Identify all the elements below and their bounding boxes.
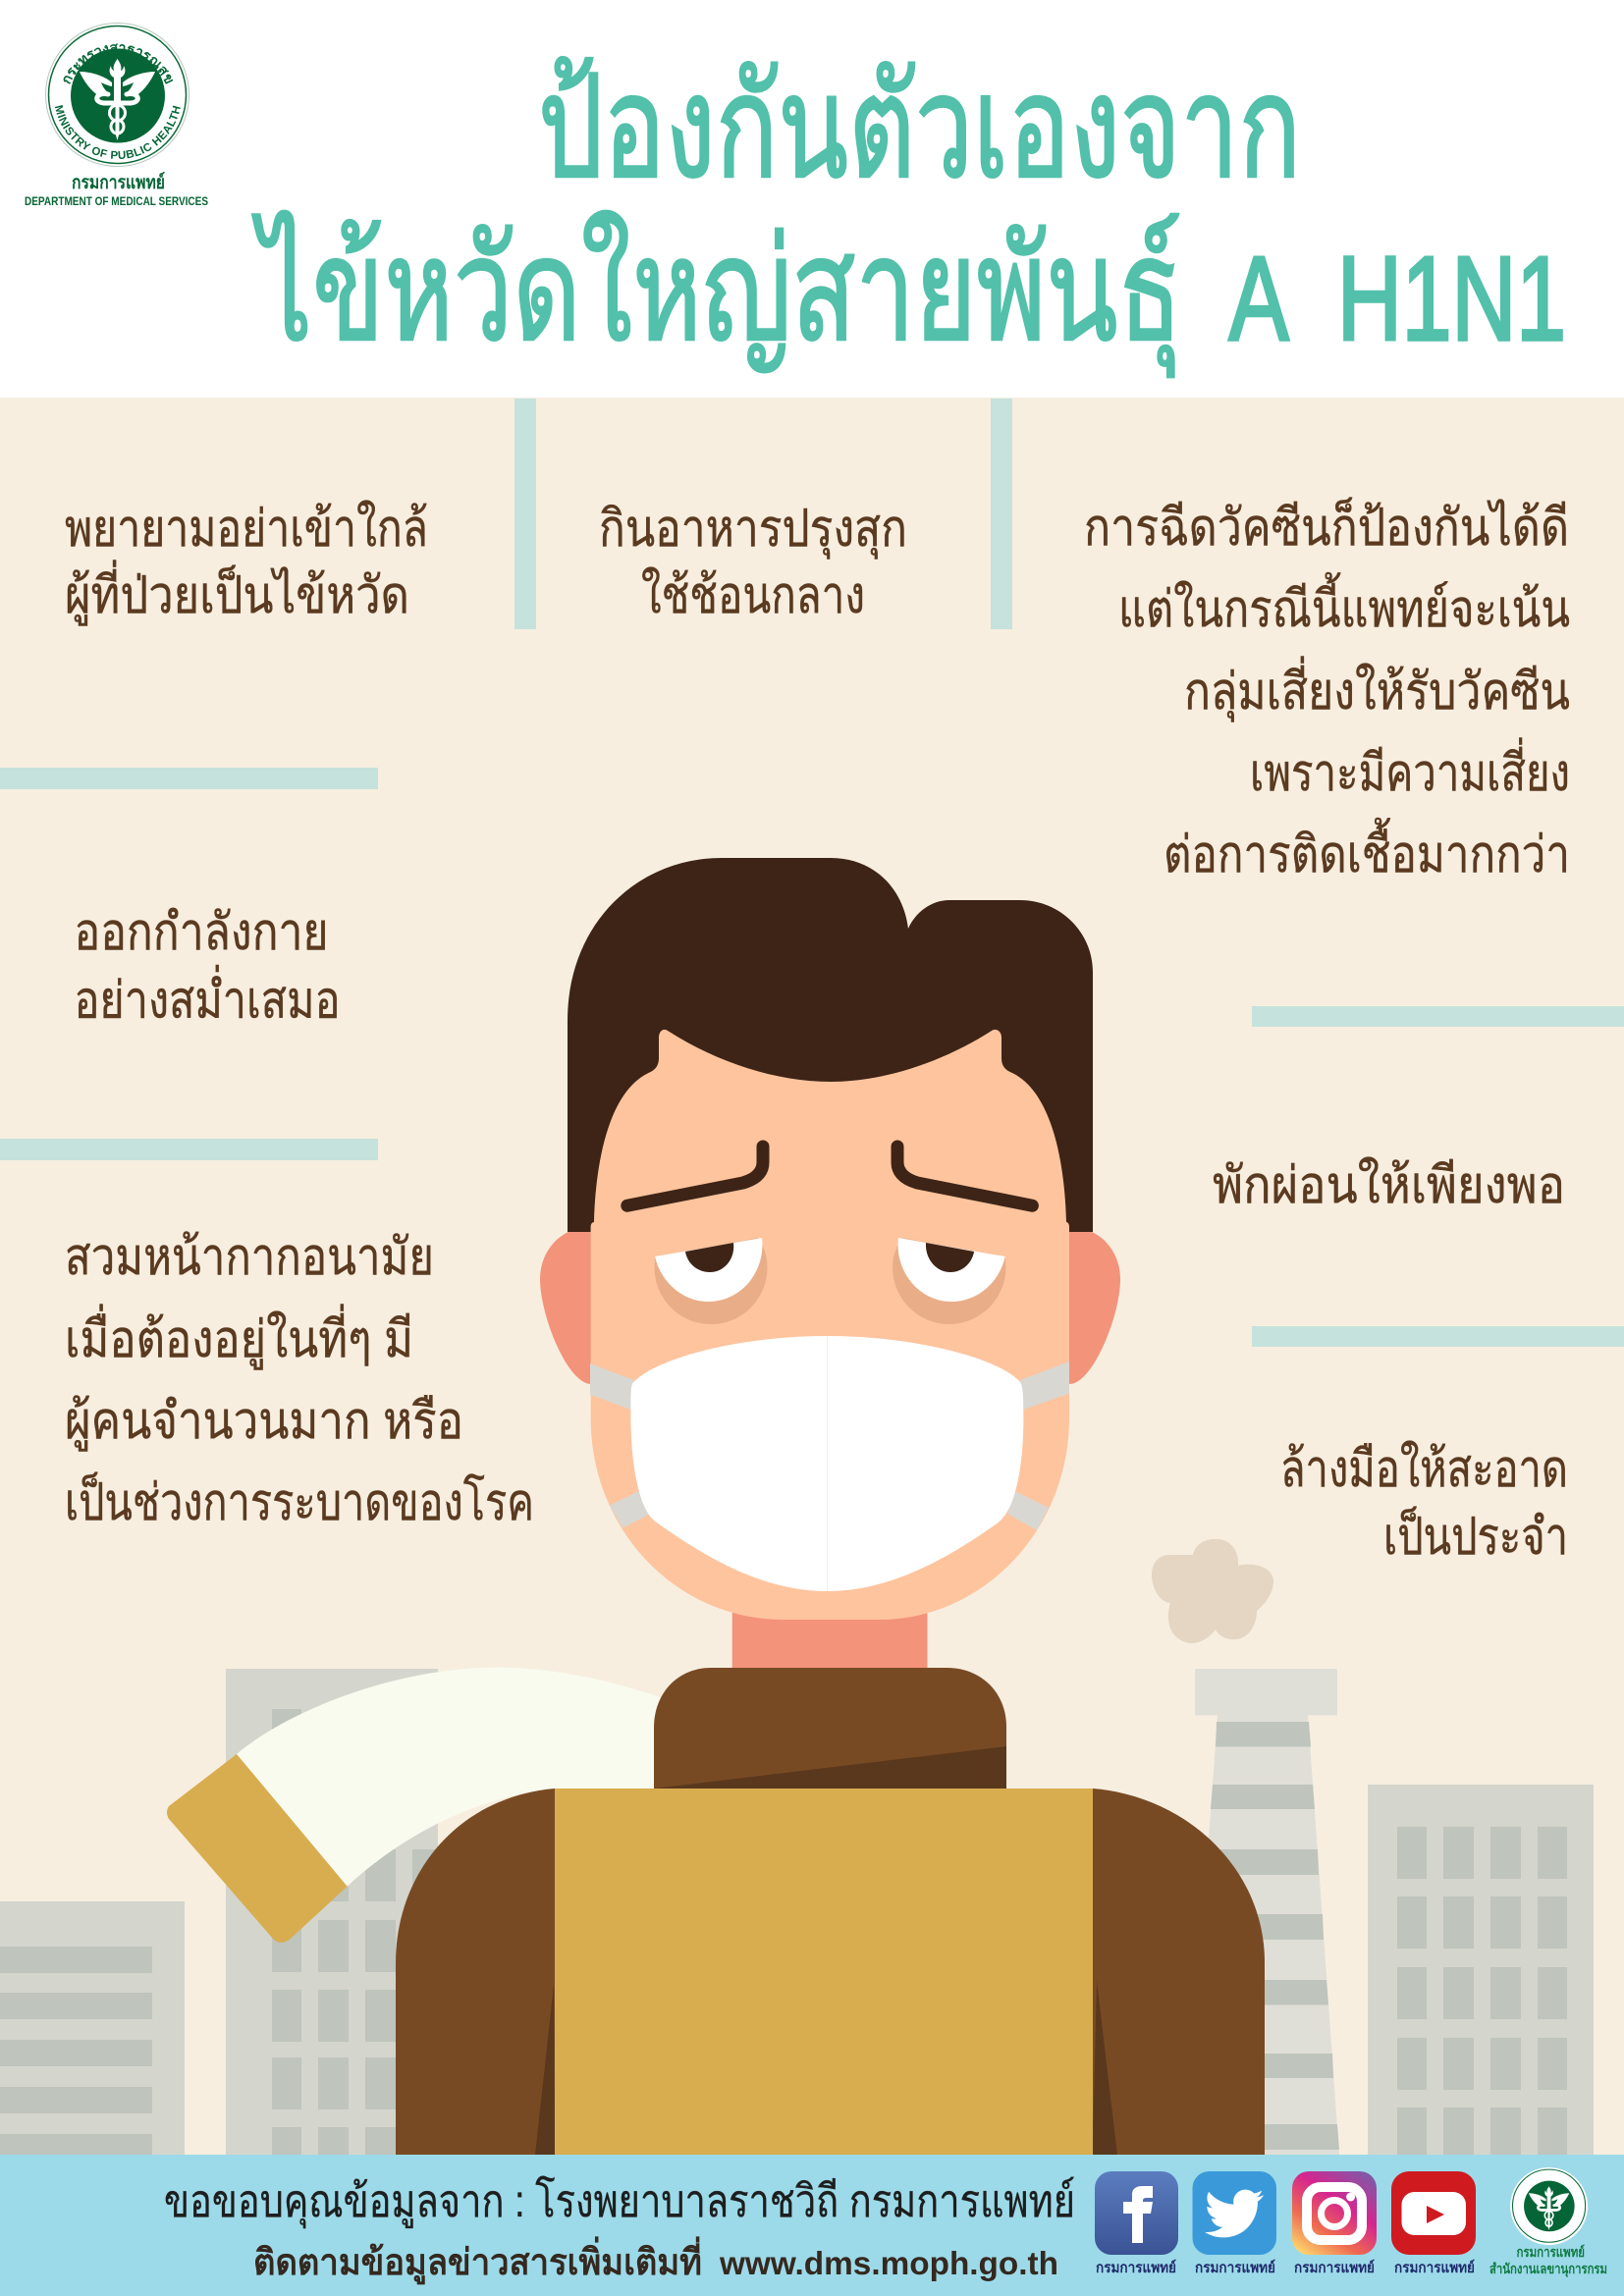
city background xyxy=(0,1539,1594,2155)
chimney xyxy=(1186,1669,1339,2155)
decorative bars xyxy=(0,399,1624,1347)
social labels: กรมการแพทย์ xyxy=(1195,2259,1275,2276)
text: serving spoon: กินอาหารปรุงสุก xyxy=(599,501,907,560)
left eye xyxy=(654,1238,768,1324)
icon: facebook xyxy=(1095,2171,1178,2255)
background: beige panel xyxy=(0,398,1624,2155)
building middle xyxy=(226,1669,438,2155)
text: avoid sick people: ผู้ที่ป่วยเป็นไข้หวัด xyxy=(65,560,409,626)
eyebrows xyxy=(627,1147,1032,1205)
text: exercise: อย่างสม่ำเสมอ xyxy=(75,964,340,1029)
logo: small ministry seal with label xyxy=(1489,2167,1607,2277)
background: header white xyxy=(0,0,1624,398)
text: exercise: ออกกำลังกาย xyxy=(75,904,328,961)
text: wear a mask: เมื่อต้องอยู่ในที่ๆ มี xyxy=(65,1304,413,1370)
social labels xyxy=(1096,2259,1475,2276)
jacket shadows xyxy=(535,1981,1117,2155)
footer band xyxy=(0,2155,1624,2296)
building right xyxy=(1368,1785,1594,2155)
neck xyxy=(732,1600,927,1679)
text: wear a mask: สวมหน้ากากอนามัย xyxy=(65,1229,434,1286)
icon: youtube xyxy=(1391,2171,1476,2255)
icon: twitter xyxy=(1192,2171,1276,2255)
text: vaccine xyxy=(1084,498,1570,883)
logo: Ministry of Public Health, Department of Medical Services: DEPARTMENT OF MEDICAL SERVICES xyxy=(25,196,208,208)
vest xyxy=(555,1789,1093,2155)
text: avoid sick people: พยายามอย่าเข้าใกล้ xyxy=(65,500,428,558)
title: ป้องกันตัวเองจาก xyxy=(538,47,1301,207)
face xyxy=(591,1030,1069,1620)
ears xyxy=(540,1227,1120,1384)
text: wash hands xyxy=(1280,1440,1568,1566)
logo: Ministry of Public Health, Department of Medical Services: กรมการแพทย์ xyxy=(72,172,165,193)
footer text xyxy=(164,2175,1075,2285)
text: wear a mask: เป็นช่วงการระบาดของโรค xyxy=(65,1472,534,1531)
jacket xyxy=(396,1789,1265,2155)
text: avoid sick people xyxy=(65,500,428,626)
social labels: กรมการแพทย์ xyxy=(1096,2259,1176,2276)
text: wear a mask: ผู้คนจำนวนมาก หรือ xyxy=(65,1393,463,1452)
text: serving spoon xyxy=(599,501,907,624)
text: wash hands: เป็นประจำ xyxy=(1383,1507,1568,1566)
text: vaccine: กลุ่มเสี่ยงให้รับวัคซีน xyxy=(1184,656,1570,722)
footer text: ติดตามข้อมูลข่าวสารเพิ่มเติมที่ xyxy=(253,2236,702,2285)
icon: instagram xyxy=(1292,2171,1377,2255)
character xyxy=(167,858,1265,2155)
mask straps xyxy=(590,1362,1069,1530)
logo: Ministry of Public Health, Department of Medical Services: กระทรวงสาธารณสุข xyxy=(63,43,173,84)
social labels: กรมการแพทย์ xyxy=(1394,2259,1475,2276)
title: ไข้หวัดใหญ่สายพันธุ์ xyxy=(252,210,1182,378)
smoke xyxy=(1152,1539,1273,1643)
face mask xyxy=(630,1336,1023,1591)
social labels: กรมการแพทย์ xyxy=(1294,2259,1375,2276)
collar xyxy=(654,1668,1006,1789)
right eye xyxy=(893,1238,1005,1324)
scarf xyxy=(167,1668,677,1943)
footer text: www.dms.moph.go.th xyxy=(719,2245,1058,2281)
text: exercise xyxy=(75,904,340,1029)
hair xyxy=(568,858,1093,1232)
logo: small ministry seal with label: กรมการแพทย์ xyxy=(1516,2244,1585,2260)
text: rest: พักผ่อนให้เพียงพอ xyxy=(1213,1156,1565,1214)
footer text: ขอขอบคุณข้อมูลจาก : โรงพยาบาลราชวิถี กรมการแพทย์ xyxy=(164,2175,1075,2229)
text: serving spoon: ใช้ช้อนกลาง xyxy=(641,566,865,624)
building left xyxy=(0,1901,185,2155)
title: A xyxy=(1229,232,1289,365)
logo: Ministry of Public Health, Department of Medical Services xyxy=(25,23,208,208)
text: wear a mask xyxy=(65,1229,534,1531)
logo: Ministry of Public Health, Department of Medical Services: MINISTRY OF PUBLIC HEALTH xyxy=(55,105,181,159)
title xyxy=(252,47,1566,378)
